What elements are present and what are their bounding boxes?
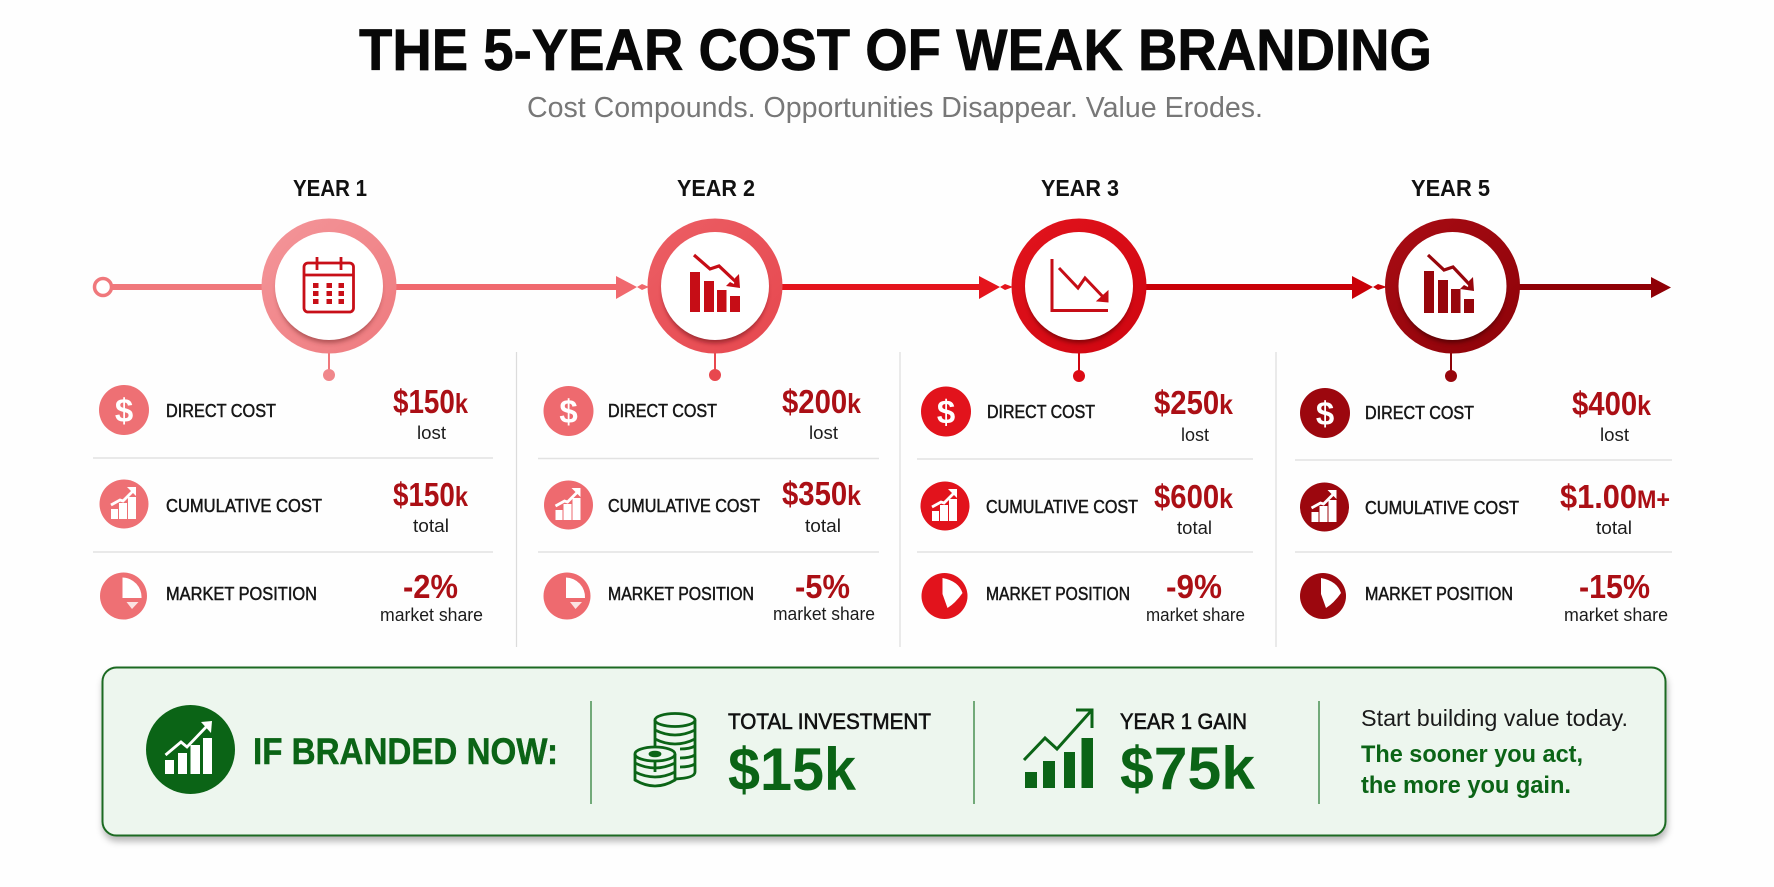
subtitle: Cost Compounds. Opportunities Disappear. Value Erodes. (527, 92, 1263, 124)
direct cost label: DIRECT COST (987, 402, 1095, 422)
market position value: -2% (403, 568, 458, 605)
direct cost unit: lost (1600, 424, 1629, 445)
cumulative cost label: CUMULATIVE COST (166, 496, 322, 516)
direct cost label: DIRECT COST (166, 401, 276, 421)
title: THE 5-YEAR COST OF WEAK BRANDING (359, 18, 1432, 83)
market position value: -15% (1579, 568, 1650, 605)
icon: pie (544, 572, 590, 620)
icon: falling bars (1424, 255, 1474, 313)
market position value: -9% (1166, 568, 1222, 605)
direct cost value: $200k (782, 383, 861, 420)
market position value: -5% (795, 568, 850, 605)
market position unit: market share (773, 603, 875, 624)
arrow: year 5 onward (1519, 277, 1671, 298)
year 5 heading: YEAR 5 (1411, 175, 1490, 201)
icon: pie (1300, 573, 1346, 619)
total investment label: TOTAL INVESTMENT (728, 709, 931, 734)
cumulative cost label: CUMULATIVE COST (986, 497, 1138, 517)
year 1 node (262, 218, 396, 381)
icon: falling line chart (1052, 259, 1108, 310)
panel: if branded now (102, 668, 1666, 836)
cumulative cost unit: total (1177, 517, 1212, 538)
icon: dollar: $ (937, 394, 955, 430)
direct cost unit: lost (417, 422, 446, 443)
year 2 node (648, 218, 782, 381)
cumulative cost unit: total (1596, 517, 1632, 538)
timeline start marker (94, 278, 112, 296)
icon: dollar: $ (115, 392, 133, 429)
icon: rising bars (920, 482, 970, 530)
year 1 gain value: $75k (1120, 735, 1256, 802)
callout heading: IF BRANDED NOW: (253, 731, 558, 772)
market position label: MARKET POSITION (608, 584, 754, 604)
market position label: MARKET POSITION (166, 584, 317, 604)
icon: dollar: $ (559, 393, 578, 430)
icon: green rising chart (1024, 710, 1093, 788)
year 5 node (1385, 218, 1520, 382)
panel: year 1 metrics (93, 383, 493, 625)
icon: rising bars (1300, 482, 1349, 532)
icon: dollar (1300, 388, 1350, 438)
arrow: year 1 to year 2 (395, 276, 649, 299)
timeline (94, 276, 1671, 299)
cumulative cost unit: total (413, 515, 449, 536)
icon: dollar (544, 386, 594, 436)
closing emphasis line 2: the more you gain. (1361, 772, 1571, 799)
cumulative cost label: CUMULATIVE COST (1365, 498, 1519, 518)
cumulative cost unit: total (805, 515, 841, 536)
cumulative cost value: $1.00M+ (1560, 478, 1670, 515)
market position unit: market share (380, 604, 483, 625)
panel: year 5 metrics (1295, 385, 1672, 625)
cumulative cost value: $350k (782, 475, 861, 512)
year 3 heading: YEAR 3 (1041, 175, 1119, 201)
icon: dollar: $ (1316, 395, 1334, 432)
icon: coin stacks (635, 714, 695, 786)
cumulative cost value: $600k (1154, 478, 1233, 515)
panel dividers (516, 352, 1276, 647)
panel: year 3 metrics (917, 384, 1253, 625)
icon: green growth badge (146, 705, 235, 794)
direct cost value: $400k (1572, 385, 1651, 422)
year 2 heading: YEAR 2 (677, 175, 755, 201)
year 1 heading: YEAR 1 (293, 175, 367, 201)
arrow: year 2 to year 3 (782, 276, 1013, 299)
market position label: MARKET POSITION (986, 584, 1130, 604)
market position unit: market share (1564, 604, 1668, 625)
icon: rising bars (100, 480, 148, 528)
closing note: Start building value today. (1361, 705, 1628, 731)
icon: dollar (921, 386, 971, 436)
icon: pie (100, 572, 147, 620)
direct cost label: DIRECT COST (1365, 403, 1474, 423)
cumulative cost value: $150k (393, 476, 468, 513)
icon: calendar (304, 257, 354, 312)
total investment value: $15k (728, 736, 857, 803)
panel: year 2 metrics (538, 383, 879, 624)
segment: start to year 1 (112, 284, 264, 290)
cumulative cost label: CUMULATIVE COST (608, 496, 760, 516)
icon: falling bars (690, 255, 740, 312)
market position label: MARKET POSITION (1365, 584, 1513, 604)
closing emphasis line 1: The sooner you act, (1361, 741, 1583, 768)
direct cost unit: lost (809, 422, 838, 443)
direct cost value: $150k (393, 383, 468, 420)
year 1 gain label: YEAR 1 GAIN (1120, 709, 1247, 734)
icon: rising bars (544, 480, 593, 530)
year 3 node (1012, 218, 1146, 382)
direct cost label: DIRECT COST (608, 401, 717, 421)
direct cost value: $250k (1154, 384, 1233, 421)
direct cost unit: lost (1181, 424, 1209, 445)
arrow: year 3 to year 5 (1146, 276, 1387, 299)
icon: pie (922, 573, 968, 619)
market position unit: market share (1146, 604, 1245, 625)
icon: dollar (99, 385, 149, 435)
